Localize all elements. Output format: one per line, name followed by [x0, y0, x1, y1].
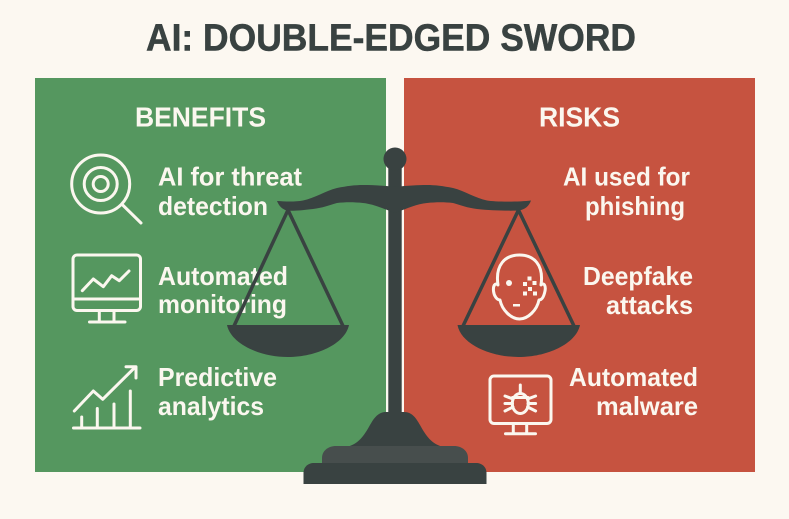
left chains [234, 210, 343, 326]
text: Predictive analytics: analytics [158, 391, 264, 421]
icon: deepfake face [493, 255, 545, 319]
text: Predictive analytics: Predictive [158, 362, 277, 392]
pole [388, 165, 402, 420]
left pan [227, 325, 349, 357]
text: Automated monitoring [158, 261, 288, 319]
balance scale [227, 148, 580, 484]
text: Automated monitoring: monitoring [158, 289, 287, 319]
text: Deepfake attacks [583, 261, 693, 320]
heading: benefits: BENEFITS [135, 102, 266, 132]
text: Predictive analytics [158, 362, 277, 421]
text: Deepfake attacks: Deepfake [583, 261, 693, 291]
right chains [463, 210, 574, 326]
text: Deepfake attacks: attacks [606, 290, 693, 320]
icon: target magnifier [72, 155, 141, 223]
base bell [348, 412, 442, 446]
text: AI for threat detection: AI for threat [158, 162, 302, 192]
text: AI used for phishing: phishing [585, 191, 685, 221]
icon: growth chart [74, 367, 140, 428]
text: Automated malware: Automated [569, 362, 698, 392]
text: Automated malware [569, 362, 698, 421]
icon: monitor with chart [73, 255, 140, 322]
heading: risks: RISKS [539, 102, 620, 132]
beam [277, 185, 531, 213]
text: Automated monitoring: Automated [158, 261, 288, 291]
icon: monitor with bug [490, 376, 551, 434]
text: AI for threat detection: detection [158, 191, 268, 221]
panel: benefits [35, 78, 386, 472]
finial [384, 148, 406, 170]
base bottom tier [304, 463, 486, 484]
text: AI used for phishing [563, 162, 690, 221]
right pan [458, 325, 580, 357]
text: AI used for phishing: AI used for [563, 162, 690, 192]
base middle tier [322, 446, 468, 464]
title: AI: DOUBLE-EDGED SWORD [146, 18, 636, 60]
text: Automated malware: malware [596, 391, 698, 421]
text: AI for threat detection [158, 162, 302, 221]
panel: risks [404, 78, 755, 472]
